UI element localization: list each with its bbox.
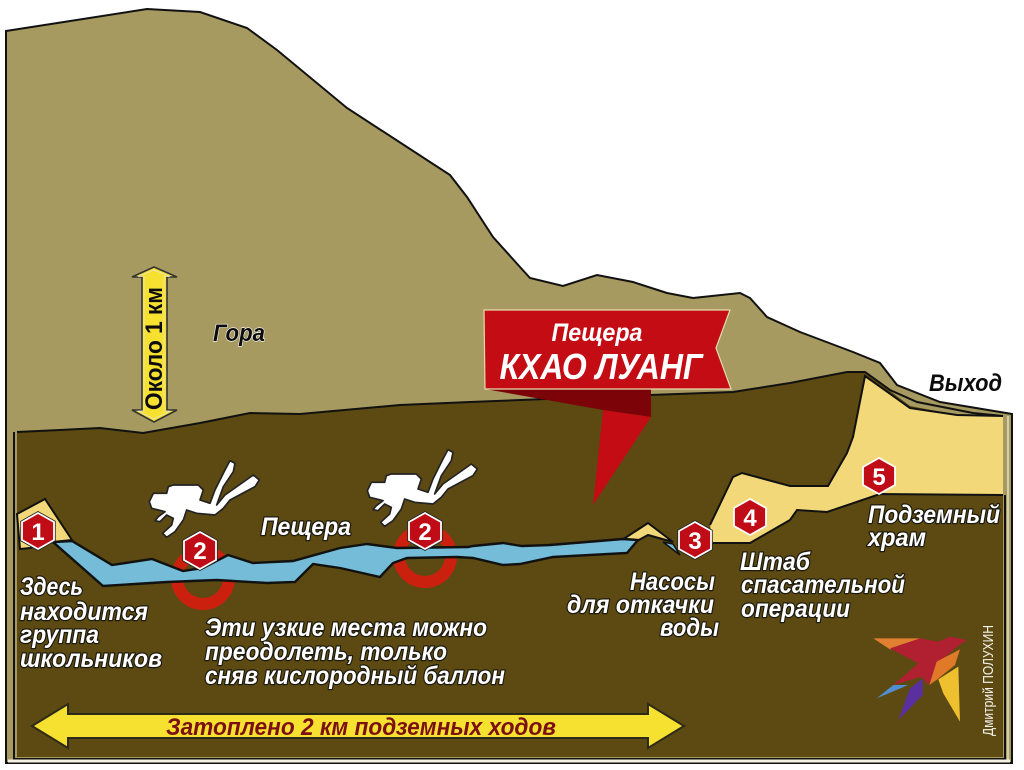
ring: narrow passage 2 bbox=[399, 530, 451, 582]
diver 1 bbox=[149, 461, 259, 537]
marker 1 bbox=[22, 513, 54, 549]
banner subtitle: Пещера bbox=[552, 319, 643, 347]
marker 4: 4 bbox=[743, 505, 757, 532]
marker 4 bbox=[734, 499, 766, 535]
arrow: mountain height bbox=[132, 267, 177, 422]
flooded label: Затоплено 2 км подземных ходов bbox=[166, 714, 556, 741]
text: rescue headquarters: операции bbox=[741, 595, 850, 623]
text: pumps: для откачки bbox=[567, 591, 714, 619]
cave chamber: small yellow peak bbox=[622, 523, 673, 542]
frame inner lines bbox=[14, 432, 1005, 759]
text: pumps: воды bbox=[660, 614, 719, 642]
text: underground temple: Подземный bbox=[868, 501, 1000, 529]
cave chamber: yellow entrance section bbox=[710, 376, 1003, 543]
marker 3 bbox=[679, 522, 711, 558]
label: exit: Выход bbox=[929, 370, 1002, 397]
text: boys location: находится bbox=[20, 598, 148, 626]
arrow: flooded length bbox=[32, 704, 684, 748]
author credit: Дмитрий ПОЛУХИН bbox=[980, 625, 997, 736]
banner: cave name bbox=[484, 310, 731, 505]
marker 3: 3 bbox=[688, 528, 702, 555]
marker 5 bbox=[863, 458, 895, 494]
text: rescue headquarters: спасательной bbox=[741, 571, 905, 599]
marker 1: 1 bbox=[31, 519, 45, 546]
marker 2 left bbox=[184, 532, 216, 569]
flooded tunnel: short end section bbox=[663, 542, 680, 555]
text: pumps bbox=[567, 568, 719, 642]
text: underground temple bbox=[866, 501, 1000, 552]
text: underground temple: храм bbox=[866, 524, 926, 552]
marker 2 right: 2 bbox=[418, 519, 432, 546]
logo: bird bbox=[873, 637, 967, 722]
text: pumps: Насосы bbox=[630, 568, 715, 596]
text: narrow passages: Эти узкие места можно bbox=[205, 614, 487, 642]
text: boys location: Здесь bbox=[20, 573, 83, 601]
underground rock bbox=[17, 372, 1003, 757]
flooded tunnel bbox=[53, 539, 638, 586]
text: narrow passages: сняв кислородный баллон bbox=[205, 662, 505, 690]
banner title: КХАО ЛУАНГ bbox=[500, 346, 704, 387]
text: narrow passages bbox=[205, 614, 505, 690]
diver 2 bbox=[367, 450, 477, 526]
marker 5: 5 bbox=[872, 464, 886, 491]
arrow label: Около 1 км bbox=[141, 287, 168, 410]
marker 2 right bbox=[409, 513, 441, 549]
text: boys location: школьников bbox=[20, 645, 162, 673]
marker 2 left: 2 bbox=[193, 538, 207, 565]
ring: narrow passage 1 bbox=[177, 552, 229, 604]
text: rescue headquarters: Штаб bbox=[740, 548, 811, 576]
label: mountain: Гора bbox=[213, 320, 265, 347]
text: boys location: группа bbox=[20, 621, 99, 649]
cave chamber: boys location bbox=[17, 499, 72, 549]
text: narrow passages: преодолеть, только bbox=[205, 638, 447, 666]
text: rescue headquarters bbox=[740, 548, 905, 623]
label: cave: Пещера bbox=[261, 513, 351, 541]
text: boys location bbox=[20, 573, 162, 673]
